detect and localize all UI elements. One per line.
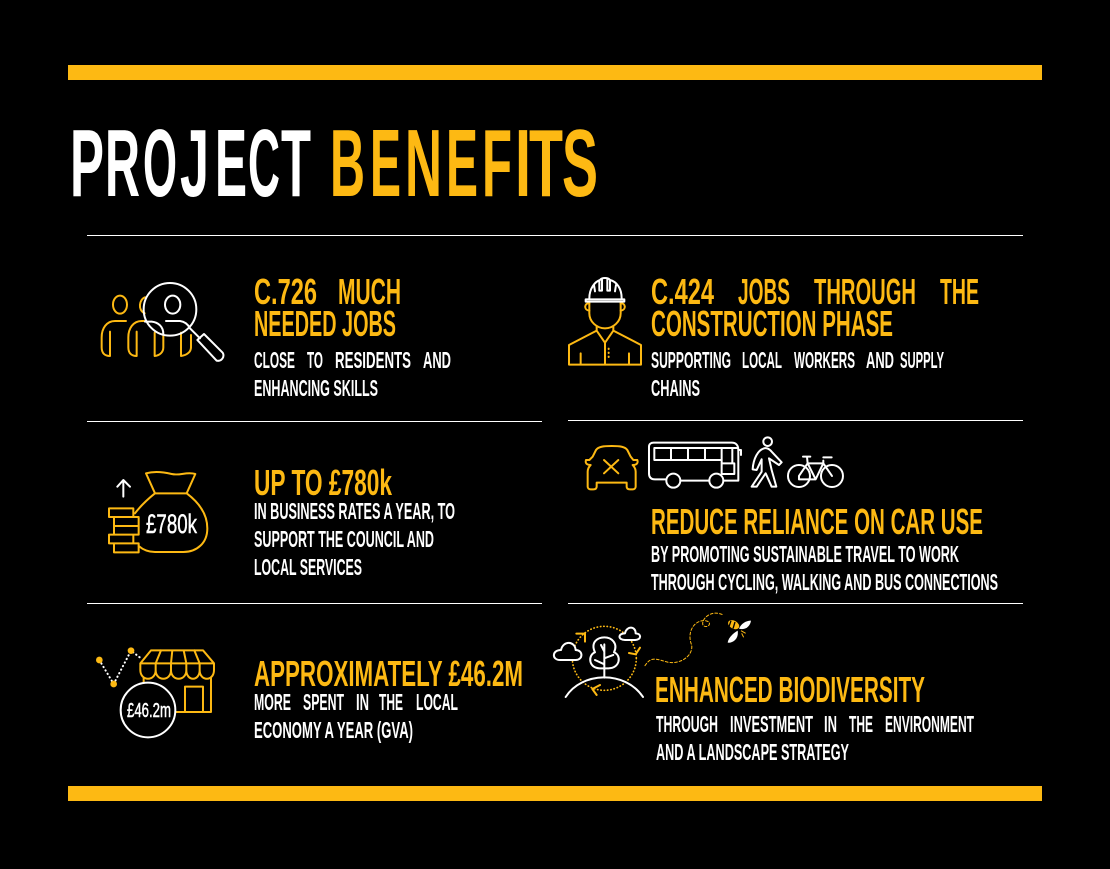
body text — [651, 541, 998, 595]
icon: walker — [752, 437, 782, 487]
body text: WORKERS — [794, 347, 855, 373]
panel: construction jobs: SUPPLY — [900, 347, 944, 373]
body text: MORE — [254, 689, 291, 715]
panel: business rates — [109, 462, 455, 580]
body text: TO — [307, 347, 323, 373]
body text: CHAINS — [651, 375, 700, 401]
body text — [254, 689, 458, 743]
heading: APPROXIMATELY £46.2M — [254, 653, 523, 694]
body text: IN — [824, 711, 837, 737]
heading: THE — [940, 271, 979, 312]
body text: IN BUSINESS RATES A YEAR, TO — [254, 498, 455, 524]
body text — [651, 347, 944, 401]
title: T — [281, 110, 311, 217]
body text: AND — [423, 347, 451, 373]
icon: people and magnifier — [102, 283, 223, 361]
title: R — [105, 110, 140, 217]
top bar — [68, 65, 1042, 80]
heading: ENHANCED BIODIVERSITY — [655, 669, 925, 710]
panel: construction jobs — [569, 271, 979, 401]
title: I — [515, 110, 531, 217]
body text: SPENT — [303, 689, 344, 715]
body text: SUPPORTING — [651, 347, 731, 373]
body text: RESIDENTS — [335, 347, 411, 373]
heading: JOBS — [738, 271, 790, 312]
icon: bee — [726, 618, 751, 643]
body text: IN — [356, 689, 369, 715]
body text: SUPPORT THE COUNCIL AND — [254, 526, 434, 552]
body text: LOCAL — [416, 689, 458, 715]
bottom bar — [68, 786, 1042, 801]
body text: THE — [379, 689, 403, 715]
body text: ENVIRONMENT — [885, 711, 974, 737]
title: C — [248, 110, 280, 217]
panel: much needed jobs — [102, 271, 451, 401]
icon: bicycle — [788, 457, 843, 487]
heading — [651, 271, 979, 344]
icon: tree and clouds — [554, 613, 723, 697]
body text — [254, 347, 451, 401]
icon: construction worker — [569, 278, 641, 365]
heading: UP TO £780k — [254, 462, 393, 503]
body text: AND — [866, 347, 894, 373]
body text: LOCAL SERVICES — [254, 554, 362, 580]
title: E — [370, 110, 401, 217]
icon: money bag and coins — [109, 472, 207, 552]
icon: bus — [649, 443, 741, 488]
title: T — [529, 110, 563, 217]
body text: AND A LANDSCAPE STRATEGY — [656, 739, 849, 765]
title: N — [405, 110, 442, 217]
heading: NEEDED JOBS — [254, 303, 396, 344]
panel: reduce car use — [586, 437, 998, 595]
heading: CONSTRUCTION PHASE — [651, 303, 893, 344]
title: E — [446, 110, 478, 217]
panel: local economy — [96, 647, 523, 743]
heading: C.424 — [651, 271, 714, 312]
icons: bus, walker, bicycle — [649, 437, 843, 488]
title — [70, 110, 598, 217]
title: P — [70, 110, 104, 217]
icon label: £46.2m — [127, 700, 171, 722]
icon: shop and dotted chart — [96, 647, 214, 737]
title: F — [482, 110, 512, 217]
icon: car — [586, 446, 638, 489]
title: J — [180, 110, 209, 217]
body text: CLOSE — [254, 347, 295, 373]
title: O — [143, 110, 177, 217]
body text: INVESTMENT — [730, 711, 813, 737]
panel: biodiversity — [554, 613, 974, 765]
body text — [254, 498, 455, 580]
body text: ENHANCING SKILLS — [254, 375, 378, 401]
title: B — [330, 110, 365, 217]
title: S — [562, 110, 598, 217]
title: E — [215, 110, 247, 217]
body text: ECONOMY A YEAR (GVA) — [254, 717, 413, 743]
heading — [254, 271, 401, 344]
body text — [656, 711, 974, 765]
heading: C.726 — [254, 271, 317, 312]
body text: THE — [849, 711, 873, 737]
heading: MUCH — [338, 271, 401, 312]
heading: THROUGH — [814, 271, 916, 312]
icon label: £780k — [146, 509, 197, 539]
body text: LOCAL — [742, 347, 782, 373]
body text: THROUGH — [656, 711, 718, 737]
